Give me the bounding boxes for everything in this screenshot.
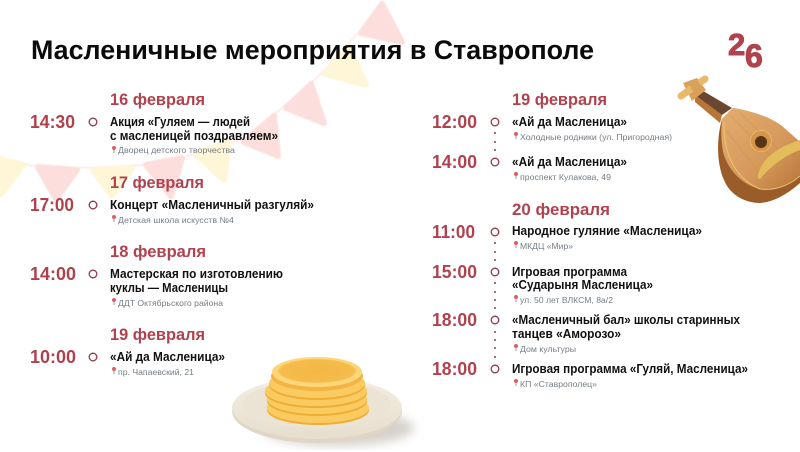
event 14:30 [30,112,278,155]
bunting garland [0,4,402,199]
event 14:00 right: проспект Кулакова, 49 [520,172,611,182]
logo: 26: 6 [745,38,763,74]
event 14:00 right: 14:00 [432,152,477,172]
event 15:00: Игровая программа [512,265,628,279]
event 14:00 right [432,152,627,182]
event 14:00: ДДТ Октябрьского района [118,298,223,308]
date: 19 февраля right: 19 февраля [512,90,607,109]
event 18:00 ball: «Масленичный бал» школы старинных [512,313,740,327]
event 10:00 [30,347,225,377]
event 18:00 game: Игровая программа «Гуляй, Масленица» [512,362,748,376]
event 18:00 ball [432,310,740,354]
event 10:00: 10:00 [30,347,76,367]
event 18:00 game: КП «Ставрополец» [520,379,597,389]
event 18:00 game: 18:00 [432,359,477,379]
event 18:00 ball: танцев «Аморозо» [512,327,621,341]
event 15:00: «Сударыня Масленица» [512,278,653,292]
event 11:00: Народное гуляние «Масленица» [512,224,702,238]
event 14:00: Мастерская по изготовлению [110,267,283,281]
event 10:00: «Ай да Масленица» [110,350,225,364]
logo: 26: 2 [728,27,745,62]
date: 17 февраля: 17 февраля [110,173,204,192]
event 14:00: куклы — Масленицы [110,281,228,295]
event 12:00: «Ай да Масленица» [512,115,627,129]
bridge [758,140,800,179]
event 11:00: 11:00 [432,222,475,242]
event 14:30: Акция «Гуляем — людей [110,115,250,129]
event 14:00: 14:00 [30,264,76,284]
event 11:00 [432,222,702,251]
event 14:30: 14:30 [30,112,75,132]
timeline dots 19 февраля [494,132,496,151]
title: Масленичные мероприятия в Ставрополе [31,35,594,65]
date: 18 февраля: 18 февраля [110,242,206,261]
event 12:00: 12:00 [432,112,477,132]
event 12:00: Холодные родники (ул. Пригородная) [520,132,672,142]
event 11:00: МКДЦ «Мир» [520,241,573,251]
event 14:30: Дворец детского творчества [118,145,235,155]
event 15:00 [432,262,653,305]
date: 20 февраля: 20 февраля [512,200,610,219]
event 15:00: 15:00 [432,262,477,282]
event 17:00: Детская школа искусств №4 [118,215,234,225]
event 14:00 [30,264,283,308]
icon: lute [681,78,800,203]
event 18:00 ball: Дом культуры [520,344,576,354]
date: 19 февраля: 19 февраля [110,325,205,344]
timeline dots 20 февраля [494,242,496,358]
sound hole [750,130,772,152]
event 12:00 [432,112,672,142]
event 17:00: Концерт «Масленичный разгуляй» [110,198,314,212]
event 18:00 game [432,359,748,389]
panel: right schedule [432,90,748,389]
panel: left schedule [30,90,314,377]
event 18:00 ball: 18:00 [432,310,477,330]
event 14:30: с масленицей поздравляем» [110,129,278,143]
event 17:00 [30,195,314,225]
event 14:00 right: «Ай да Масленица» [512,155,627,169]
event 17:00: 17:00 [30,195,74,215]
date: 16 февраля: 16 февраля [110,90,205,109]
event 15:00: ул. 50 лет ВЛКСМ, 8а/2 [520,295,613,305]
event 10:00: пр. Чапаевский, 21 [118,367,194,377]
icon: pancakes on plate [232,357,414,446]
